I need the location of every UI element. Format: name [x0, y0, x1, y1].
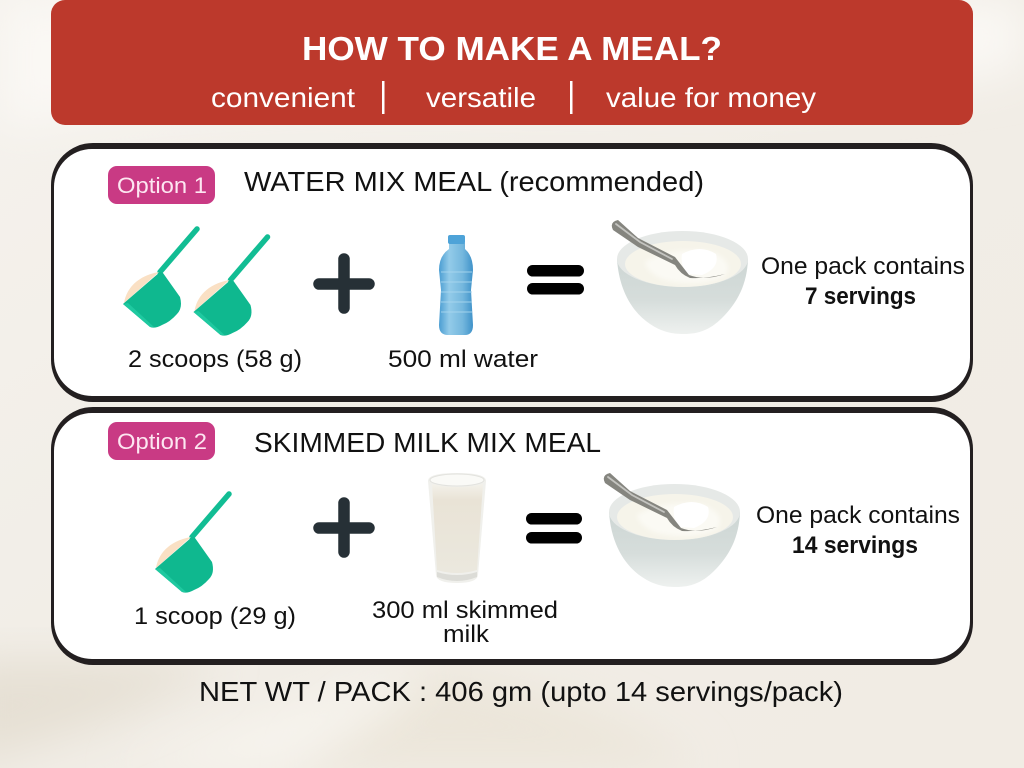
tag: option 2 [108, 422, 215, 460]
heading: water mix meal: WATER MIX MEAL (recommended) [244, 166, 704, 197]
text: pack contents: 7 servings [805, 283, 916, 310]
icon: plus [319, 503, 369, 552]
subtitle: versatile: versatile [426, 82, 536, 113]
label: 2 scoops: 2 scoops (58 g) [128, 346, 302, 373]
label: 300 ml skimmed milk: milk [443, 621, 490, 648]
label: 300 ml skimmed milk: 300 ml skimmed [372, 597, 558, 624]
icon: milk glass [428, 473, 486, 583]
icon: one scoop [155, 494, 229, 593]
text: pack contents [756, 502, 960, 559]
tag: option 1 [108, 166, 215, 204]
icon: yoghurt bowl [604, 473, 740, 587]
panel: option 1 water mix [51, 143, 973, 402]
icon: equals [527, 265, 584, 294]
icon: equals [526, 513, 582, 544]
heading: skimmed milk mix meal: SKIMMED MILK MIX MEAL [254, 427, 601, 458]
footer: net weight: NET WT / PACK : 406 gm (upto 14 servings/pack) [199, 676, 843, 707]
label: 500 ml water: 500 ml water [388, 346, 538, 373]
label: 1 scoop: 1 scoop (29 g) [134, 603, 296, 630]
subtitle: value for money: value for money [606, 82, 816, 113]
icon: two scoops [123, 229, 268, 336]
icon: plus [319, 259, 369, 308]
text: pack contents: One pack contains [761, 253, 965, 280]
text: pack contents: One pack contains [756, 502, 960, 529]
icon: water bottle [439, 235, 473, 335]
tag: option 2: Option 2 [117, 429, 207, 454]
icon: yoghurt bowl [612, 220, 748, 334]
label: 300 ml skimmed milk [372, 597, 558, 648]
header banner [51, 0, 973, 125]
text: pack contents: 14 servings [792, 532, 918, 559]
text: pack contents [761, 253, 965, 310]
subtitle: convenient: convenient [211, 82, 355, 113]
title: HOW TO MAKE A MEAL? [302, 30, 722, 67]
tag: option 1: Option 1 [117, 173, 207, 198]
panel: option 2 skimmed milk mix [51, 407, 973, 665]
